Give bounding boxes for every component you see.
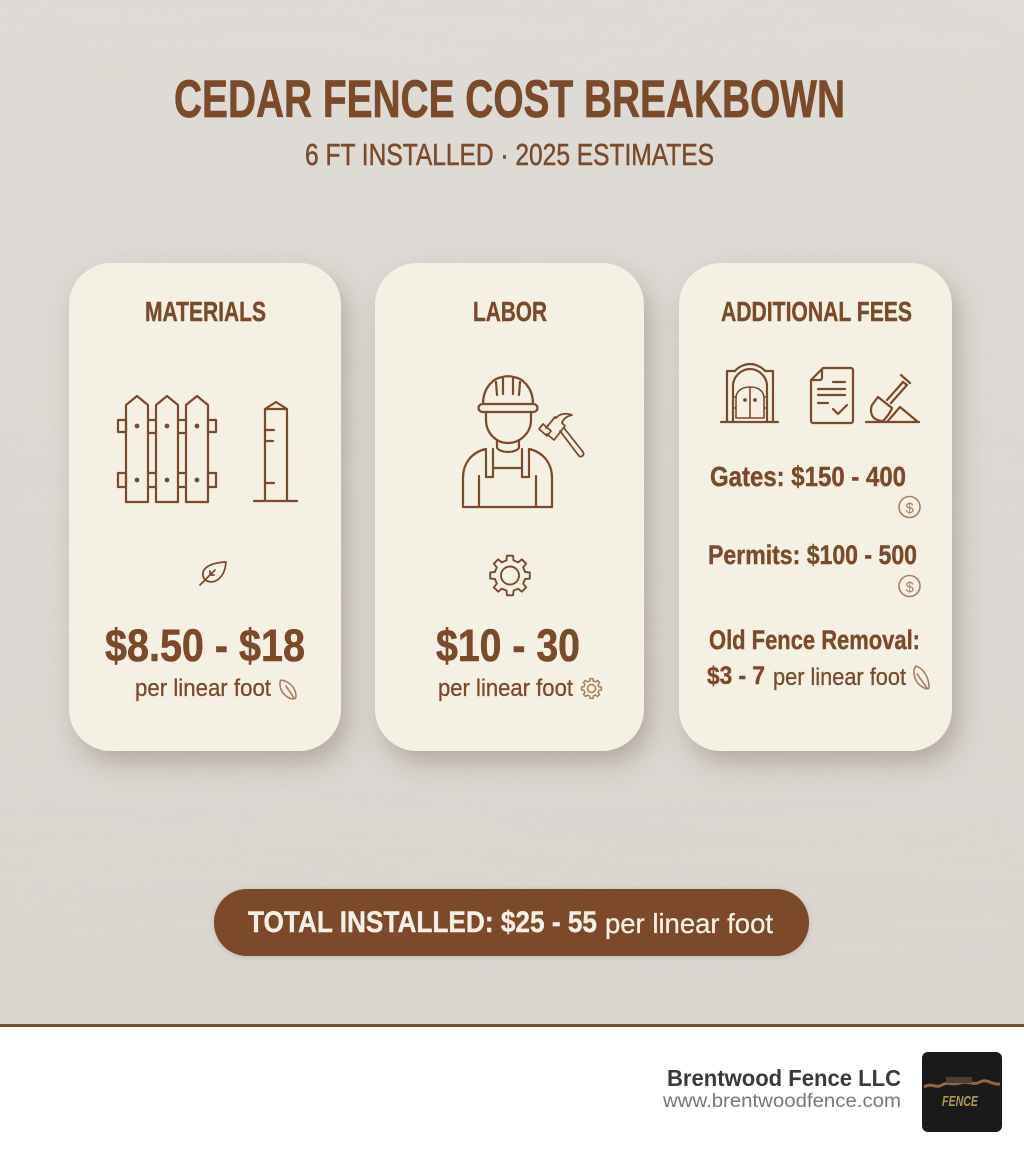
panel: labor (375, 263, 644, 751)
icon: worker with hard hat (463, 376, 552, 507)
icon: small leaf (914, 666, 929, 689)
old fence removal cost: $3 - 7 (707, 662, 765, 690)
icon: fence panel (118, 396, 216, 502)
labor unit: per linear foot (438, 675, 573, 702)
logo (922, 1052, 1002, 1132)
total amount: TOTAL INSTALLED: $25 - 55 (248, 906, 597, 939)
icon: small leaf (280, 680, 296, 699)
icon: gear (490, 556, 530, 595)
footer (0, 1024, 1024, 1154)
old fence removal unit: per linear foot (773, 664, 906, 691)
additional fees heading: ADDITIONAL FEES (721, 296, 912, 327)
icon: dollar coin: $ (906, 579, 914, 596)
icon: leaf (200, 562, 226, 585)
icon: shovel and dirt (866, 375, 919, 422)
icon: gate (721, 364, 778, 422)
labor heading: LABOR (473, 296, 547, 327)
icon: small gear (582, 679, 601, 698)
permits cost: Permits: $100 - 500 (708, 540, 917, 570)
labor price: $10 - 30 (436, 620, 580, 671)
icon: dollar coin: $ (906, 500, 914, 517)
logo: FENCE (942, 1093, 979, 1110)
icon: dollar coin (899, 496, 920, 518)
total unit: per linear foot (605, 908, 773, 939)
panel: materials (69, 263, 341, 751)
gates cost: Gates: $150 - 400 (710, 461, 906, 492)
materials price: $8.50 - $18 (105, 620, 305, 671)
old fence removal label: Old Fence Removal: (709, 625, 920, 655)
icon: permit document (811, 368, 853, 423)
total banner (214, 889, 809, 956)
website: www.brentwoodfence.com (662, 1091, 901, 1112)
subtitle: 6 FT INSTALLED · 2025 ESTIMATES (305, 137, 714, 172)
materials heading: MATERIALS (145, 296, 266, 327)
panel: additional fees (679, 263, 952, 751)
icon: fence post (254, 402, 297, 501)
icon: hammer (539, 414, 584, 457)
company name: Brentwood Fence LLC (667, 1065, 901, 1091)
materials unit: per linear foot (135, 675, 271, 702)
icon: dollar coin (899, 576, 920, 596)
